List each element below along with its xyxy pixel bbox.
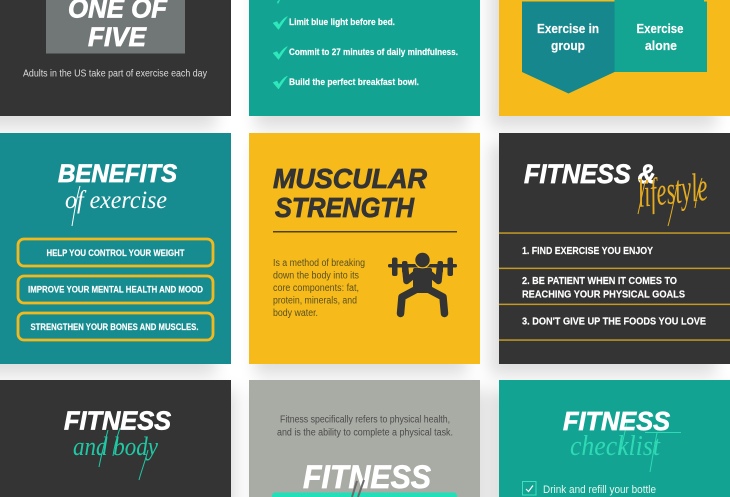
stat headline bbox=[68, 0, 168, 52]
panel: fitness and body bbox=[0, 380, 231, 497]
definition text: Fitness specifically refers to physical health, bbox=[280, 414, 450, 426]
habit: mindfulness: Commit to 27 minutes of daily mindfulness. bbox=[289, 47, 458, 57]
script subheading bbox=[73, 428, 158, 480]
panel: group vs alone bbox=[499, 0, 730, 116]
heading: STRENGTH bbox=[275, 192, 415, 223]
heading: FITNESS & bbox=[524, 159, 656, 189]
panel: fitness checklist bbox=[499, 380, 730, 497]
tip list: 3. DON'T GIVE UP THE FOODS YOU LOVE bbox=[522, 316, 706, 328]
checklist item bbox=[522, 482, 656, 496]
script subheading: checklist bbox=[570, 431, 661, 462]
teal banner bbox=[272, 492, 457, 497]
heading: FITNESS bbox=[563, 406, 671, 436]
exercise in group pentagon: group bbox=[551, 39, 585, 53]
heading: FITNESS bbox=[64, 406, 172, 436]
description: body water. bbox=[273, 308, 318, 319]
definition text bbox=[277, 414, 453, 438]
benefit: weight: HELP YOU CONTROL YOUR WEIGHT bbox=[46, 248, 185, 258]
stat highlight box bbox=[46, 0, 185, 54]
heading bbox=[273, 163, 428, 223]
exercise alone box: alone bbox=[645, 39, 677, 53]
benefit: mental health: IMPROVE YOUR MENTAL HEALTH AND MOOD bbox=[28, 284, 203, 294]
habit: blue light bbox=[273, 16, 395, 30]
habit: mindfulness bbox=[273, 46, 458, 60]
panel: muscular strength bbox=[249, 133, 480, 364]
stat headline: FIVE bbox=[88, 22, 147, 52]
habit: blue light: Limit blue light before bed. bbox=[289, 17, 395, 27]
script subheading: of exercise bbox=[65, 187, 167, 214]
benefit: mental health bbox=[18, 276, 213, 303]
heading: BENEFITS bbox=[58, 160, 177, 188]
habit: breakfast: Build the perfect breakfast bowl. bbox=[289, 77, 419, 87]
exercise in group pentagon: Exercise in bbox=[537, 22, 599, 36]
exercise alone box bbox=[614, 0, 707, 72]
script strokes bbox=[352, 480, 364, 497]
stat caption: Adults in the US take part of exercise each day bbox=[23, 68, 207, 80]
icon: clipped check bbox=[277, 0, 280, 4]
panel: fitness and lifestyle bbox=[499, 133, 730, 364]
tip list bbox=[522, 245, 706, 328]
description: protein, minerals, and bbox=[273, 296, 357, 306]
exercise alone box: Exercise bbox=[636, 22, 684, 36]
checklist item: Drink and refill your bottle bbox=[543, 484, 656, 496]
script subheading bbox=[635, 165, 710, 226]
panel: fitness definition bbox=[249, 380, 480, 497]
heading: MUSCULAR bbox=[273, 163, 428, 194]
description bbox=[273, 258, 365, 319]
description: core components: fat, bbox=[273, 283, 359, 294]
exercise in group pentagon bbox=[522, 2, 614, 94]
panel: habits checklist bbox=[249, 0, 480, 116]
panel: one of five bbox=[0, 0, 231, 116]
description: down the body into its bbox=[273, 270, 359, 282]
script subheading bbox=[65, 186, 167, 226]
tip list: 2. BE PATIENT WHEN IT COMES TO bbox=[522, 275, 677, 287]
icon: weightlifter squat bbox=[388, 252, 457, 314]
script subheading bbox=[570, 423, 681, 472]
script subheading: and body bbox=[73, 432, 158, 461]
tip list: REACHING YOUR PHYSICAL GOALS bbox=[522, 288, 685, 300]
panel: benefits of exercise bbox=[0, 133, 231, 364]
description: Is a method of breaking bbox=[273, 258, 365, 269]
habit: breakfast bbox=[273, 76, 419, 89]
definition text: and is the ability to complete a physical task. bbox=[277, 428, 453, 438]
tip list: 1. FIND EXERCISE YOU ENJOY bbox=[522, 245, 653, 257]
heading: FITNESS bbox=[303, 459, 432, 495]
benefit: weight bbox=[18, 239, 213, 266]
benefit: bones bbox=[18, 313, 213, 340]
benefit: bones: STRENGTHEN YOUR BONES AND MUSCLES. bbox=[30, 322, 198, 332]
